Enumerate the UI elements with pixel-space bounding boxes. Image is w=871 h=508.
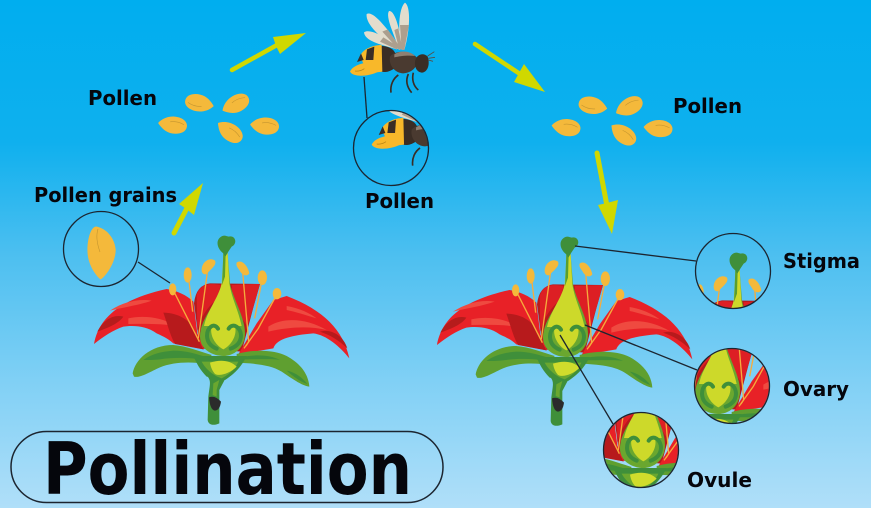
label: pollen top left: Pollen [88,86,157,110]
arrow: flower to pollen [174,183,203,233]
arrow: bee to pollen [475,44,545,92]
label: pollen under bee: Pollen [365,189,434,213]
callout: pollen grain [64,212,170,286]
label: pollen top right: Pollen [673,94,742,118]
callout: bee close-up [352,77,430,186]
label: stigma: Stigma [783,249,860,273]
arrow: pollen to stigma [597,153,618,234]
callout: ovary close-up [584,324,770,424]
callout: ovule close-up [560,334,680,488]
callout: stigma close-up [575,232,772,310]
label: ovule: Ovule [687,468,752,492]
left pollen cluster [157,90,279,147]
label: ovary: Ovary [783,377,849,401]
bee carrying pollen [350,3,435,93]
arrow: pollen to bee [232,33,306,70]
left flower [94,236,349,425]
right pollen cluster [551,92,673,149]
label: pollen grains: Pollen grains [34,183,177,207]
right flower with pistil parts [437,237,692,426]
